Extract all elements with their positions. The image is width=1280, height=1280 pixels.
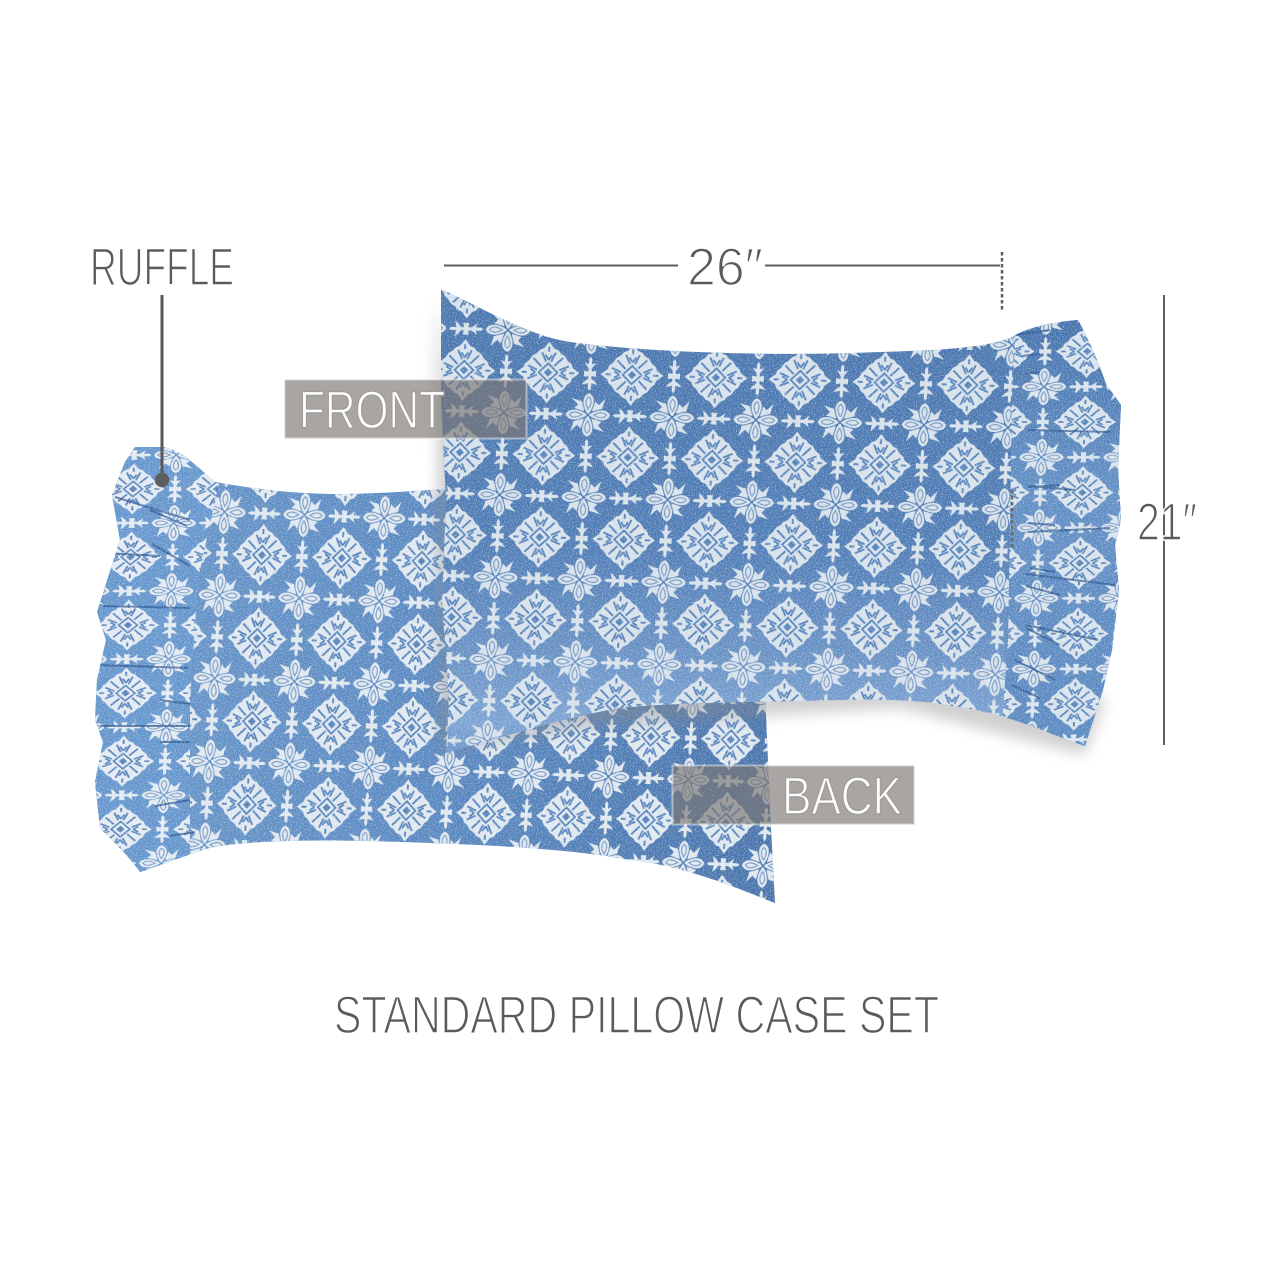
title: STANDARD PILLOW CASE SET xyxy=(334,986,939,1045)
label text: ruffle: RUFFLE xyxy=(90,238,234,297)
dashed end marker xyxy=(1001,252,1003,310)
dashed seam marker on pillow xyxy=(1011,490,1013,550)
leader line xyxy=(160,295,164,475)
height line xyxy=(1163,295,1165,745)
panel: back pillow case xyxy=(90,440,790,910)
width line right xyxy=(765,264,1000,266)
back label text: BACK xyxy=(782,767,902,826)
shadow under front pillow xyxy=(436,300,1105,755)
back label box xyxy=(672,766,914,824)
callout: front label xyxy=(284,380,526,440)
height text: 21″ xyxy=(1137,493,1197,552)
ruffle on back pillow xyxy=(95,447,220,872)
leader dot xyxy=(155,473,169,487)
callout: back label xyxy=(672,766,914,826)
front label box xyxy=(284,380,526,438)
panel: front pillow case xyxy=(435,285,1130,755)
callout: ruffle label xyxy=(90,238,234,487)
width text: 26″ xyxy=(687,238,763,297)
width line left xyxy=(444,264,678,266)
front label text: FRONT xyxy=(299,381,445,440)
ruffle on front pillow xyxy=(1002,320,1121,746)
